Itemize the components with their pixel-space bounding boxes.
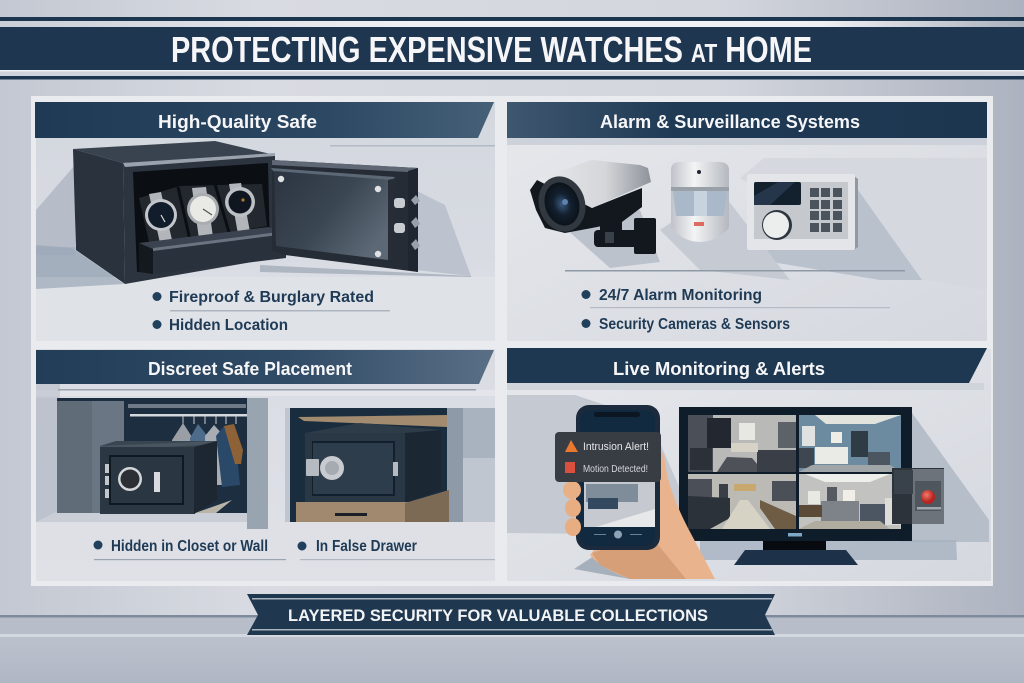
safe door (272, 160, 418, 272)
illustration: false drawer safe (285, 408, 495, 522)
footer ribbon (247, 594, 775, 635)
bullets: placement options (94, 538, 495, 560)
hand and phone (563, 405, 715, 579)
section header: alarm: Alarm & Surveillance Systems (600, 111, 860, 132)
alert notification: Intrusion Alert! (583, 441, 649, 453)
control panel with red button (892, 468, 944, 524)
drawer (139, 227, 286, 250)
title banner (0, 17, 1024, 80)
bullets: safe features (152, 289, 390, 334)
icon: warning triangle (565, 440, 578, 452)
icon: alarm keypad (747, 174, 858, 250)
icon: motion sensor (671, 162, 729, 242)
bullets: placement options: Hidden in Closet or Wall (111, 538, 268, 555)
alert notification: Motion Detected! (583, 463, 648, 475)
bullets: alarm features (582, 287, 890, 333)
fingers (563, 481, 581, 499)
panel: alarm and surveillance (507, 102, 987, 341)
panel: high-quality safe (35, 102, 495, 341)
hanging clothes (172, 416, 243, 490)
section header: live monitoring: Live Monitoring & Alerts (613, 359, 825, 379)
bullets: alarm features: 24/7 Alarm Monitoring (599, 287, 762, 304)
footer tagline: LAYERED SECURITY FOR VALUABLE COLLECTIONS (288, 607, 708, 625)
watch 3 (225, 183, 255, 234)
bullets: placement options: In False Drawer (316, 538, 417, 555)
watch tray (139, 184, 267, 246)
title: PROTECTING EXPENSIVE WATCHES AT HOME (171, 29, 812, 70)
watch 1 (145, 192, 177, 243)
bullets: safe features: Hidden Location (169, 317, 288, 334)
feed: bottom right room (799, 474, 901, 529)
feed: top right room (799, 415, 901, 472)
monitor with camera feeds (679, 407, 912, 565)
bullets: alarm features: Security Cameras & Sensors (599, 316, 790, 333)
illustration: closet safe (36, 398, 268, 529)
section header: live monitoring (507, 348, 987, 383)
section header: discreet placement (36, 350, 494, 390)
section header: alarm (507, 102, 987, 138)
outer frame (31, 96, 993, 586)
watch 2 (187, 187, 219, 239)
section header: high-quality safe (35, 102, 494, 138)
section header: high-quality safe: High-Quality Safe (158, 111, 317, 132)
section header: discreet placement: Discreet Safe Placement (148, 359, 352, 379)
panel: discreet safe placement (36, 349, 495, 581)
smartphone (576, 405, 660, 550)
monitor stand (763, 540, 826, 553)
panel: live monitoring (507, 348, 991, 581)
icon: security camera (530, 160, 656, 254)
feed: bottom left room (688, 474, 796, 529)
feed: top left room (688, 415, 796, 472)
alert notification (555, 432, 661, 482)
illustration: open safe with watches (73, 141, 420, 284)
bullets: safe features: Fireproof & Burglary Rated (169, 289, 374, 306)
locking bolts (394, 198, 405, 208)
